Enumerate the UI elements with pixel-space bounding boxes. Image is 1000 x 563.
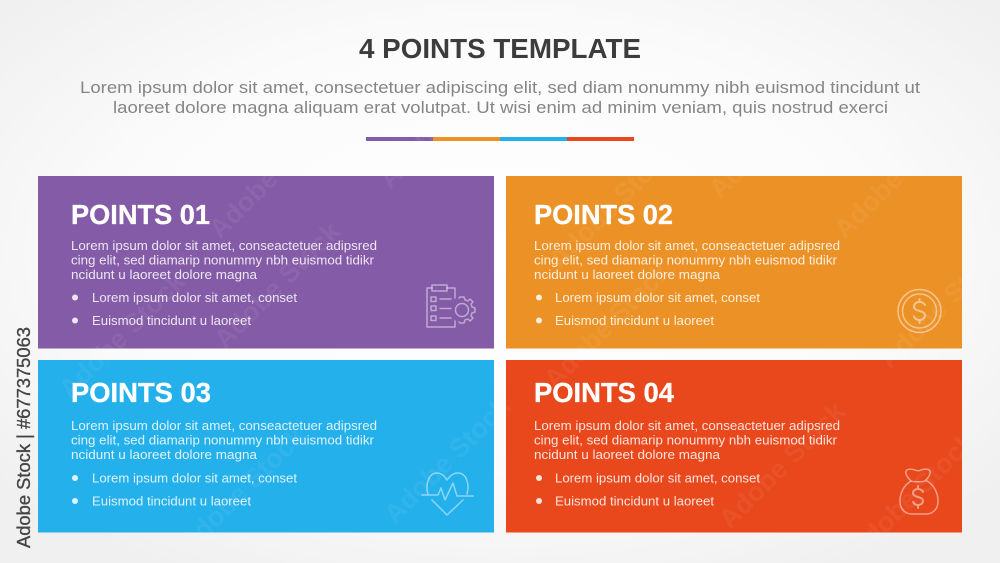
body text: points 01: ncidunt u laoreet dolore magna	[71, 268, 257, 282]
watermark pattern: Adobe Stock	[843, 426, 982, 563]
body text: points 04: cing elit, sed diamarip nonummy nbh euismod tidikr	[534, 434, 837, 448]
body text: points 03: Lorem ipsum dolor sit amet, conseactetuer adipsred	[71, 419, 377, 433]
stock id credit: Adobe Stock | #677375063	[14, 327, 34, 548]
heading: points 02: POINTS 02	[534, 199, 673, 230]
panel: points 02	[506, 176, 962, 348]
icon: money bag	[900, 469, 938, 514]
body text: points 02: Lorem ipsum dolor sit amet, conseactetuer adipsred	[534, 239, 840, 253]
icon: dollar coin	[898, 290, 941, 332]
watermark pattern: Adobe Stock	[208, 216, 347, 354]
bullet list: points 04	[536, 472, 761, 508]
watermark pattern: Adobe Stock	[713, 396, 852, 534]
bullet list: points 03: Lorem ipsum dolor sit amet, conset	[92, 472, 298, 486]
watermark pattern: Adobe Stock	[373, 56, 512, 194]
body text: points 01: Lorem ipsum dolor sit amet, conseactetuer adipsred	[71, 239, 377, 253]
subtitle text	[80, 78, 920, 117]
heading: points 01: POINTS 01	[71, 199, 210, 230]
icon: clipboard with gear	[427, 285, 475, 327]
title: 4 POINTS TEMPLATE	[359, 33, 641, 64]
body text: points 02: cing elit, sed diamarip nonummy nbh euismod tidikr	[534, 254, 837, 268]
bullet list: points 01: Euismod tincidunt u laoreet	[92, 314, 252, 328]
watermark pattern: Adobe Stock	[543, 136, 682, 274]
bullet list: points 04: Lorem ipsum dolor sit amet, conset	[555, 472, 761, 486]
heading: points 04: POINTS 04	[534, 377, 674, 408]
subtitle text: Lorem ipsum dolor sit amet, consectetuer adipiscing elit, sed diam nonummy nibh euismod tincidunt ut	[80, 78, 920, 97]
body text: points 02	[534, 239, 840, 282]
watermark pattern: Adobe Stock	[53, 266, 192, 404]
watermark pattern: Adobe Stock	[173, 421, 312, 559]
body text: points 03	[71, 419, 377, 462]
body text: points 03: ncidunt u laoreet dolore magna	[71, 448, 257, 462]
bullet list: points 02	[536, 291, 761, 328]
body text: points 04: Lorem ipsum dolor sit amet, conseactetuer adipsred	[534, 419, 840, 433]
bullet list: points 03: Euismod tincidunt u laoreet	[92, 494, 252, 508]
panel: points 03	[38, 360, 494, 532]
watermark pattern: Adobe Stock	[203, 106, 342, 244]
watermark pattern: Adobe Stock	[43, 36, 182, 174]
bullet list: points 03	[72, 472, 298, 508]
watermark pattern: Adobe Stock	[538, 256, 677, 394]
four-colour divider bar	[366, 137, 634, 141]
panel: points 01	[38, 176, 494, 348]
watermark pattern: Adobe Stock	[703, 66, 842, 204]
icon: heart with pulse	[422, 473, 473, 515]
watermark pattern: Adobe Stock	[378, 391, 517, 529]
bullet list: points 01	[72, 291, 298, 328]
body text: points 01: cing elit, sed diamarip nonummy nbh euismod tidikr	[71, 254, 374, 268]
bullet list: points 02: Lorem ipsum dolor sit amet, conset	[555, 291, 761, 305]
body text: points 04	[534, 419, 840, 462]
body text: points 02: ncidunt u laoreet dolore magna	[534, 268, 720, 282]
bullet list: points 02: Euismod tincidunt u laoreet	[555, 314, 715, 328]
body text: points 01	[71, 239, 377, 282]
bullet list: points 01: Lorem ipsum dolor sit amet, conset	[92, 291, 298, 305]
body text: points 04: ncidunt u laoreet dolore magna	[534, 448, 720, 462]
body text: points 03: cing elit, sed diamarip nonummy nbh euismod tidikr	[71, 434, 374, 448]
watermark pattern: Adobe Stock	[828, 106, 967, 244]
panel: points 04	[506, 360, 962, 532]
bullet list: points 04: Euismod tincidunt u laoreet	[555, 494, 715, 508]
heading: points 03: POINTS 03	[71, 377, 211, 408]
subtitle text: laoreet dolore magna aliquam erat volutpat. Ut wisi enim ad minim veniam, quis nostrud exerci	[113, 98, 888, 117]
